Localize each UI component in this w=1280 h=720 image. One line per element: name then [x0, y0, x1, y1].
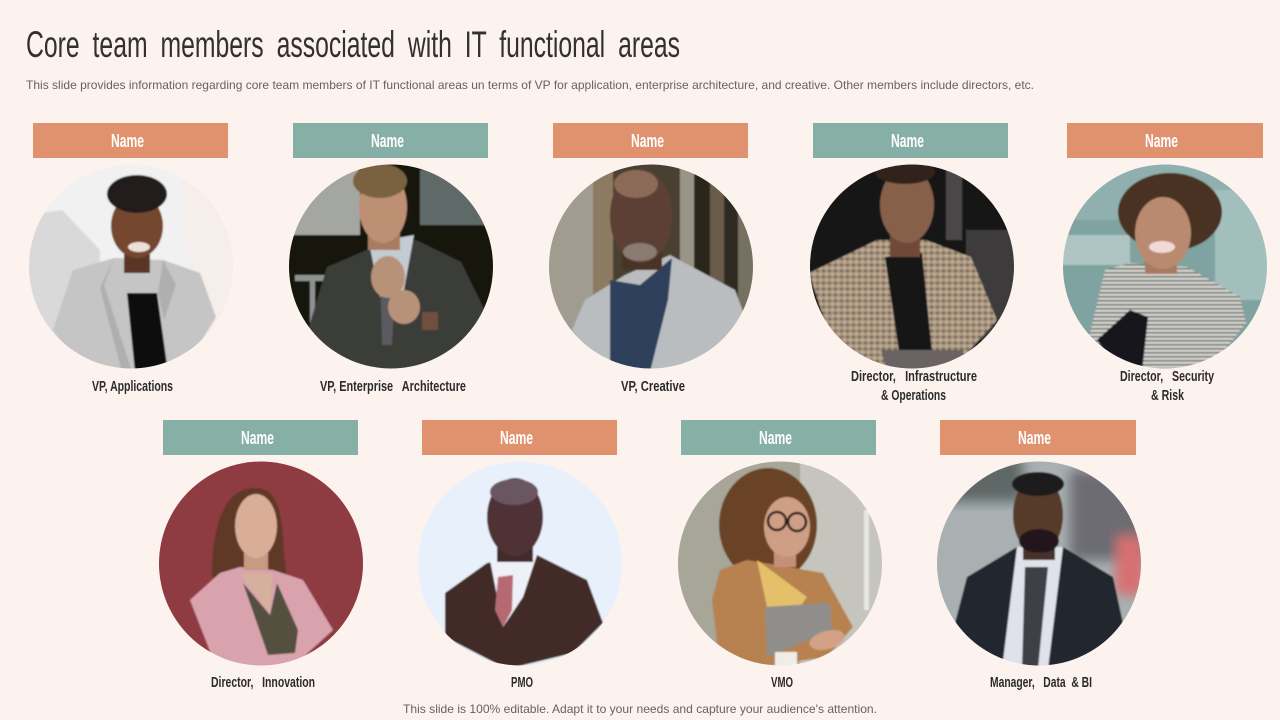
role label: Director, Infrastructure — [851, 369, 977, 385]
footer note: This slide is 100% editable. Adapt it to your needs and capture your audience's attention. — [403, 702, 877, 716]
role label: & Operations — [881, 388, 946, 404]
panel: VP Applications — [25, 123, 240, 395]
panel: Manager Data and BI — [933, 420, 1145, 691]
panel: VP Enterprise Architecture — [285, 123, 497, 395]
portrait: VP Applications — [29, 164, 217, 368]
panel: VP Creative — [545, 123, 758, 395]
panel: PMO — [414, 420, 626, 691]
portrait: PMO — [414, 457, 626, 669]
portrait: VMO — [674, 457, 886, 669]
role label: Director, Security — [1120, 369, 1214, 385]
portrait: Director Security — [1060, 160, 1275, 372]
portrait: Manager Data and BI — [933, 457, 1145, 669]
portrait: VP Enterprise Architecture — [285, 160, 497, 372]
title: Core team members associated with IT functional areas — [26, 24, 680, 65]
panel: Director Security and Risk — [1060, 123, 1275, 404]
name bar — [163, 420, 358, 455]
portrait: Director Infrastructure — [805, 160, 1017, 372]
role label: VP, Creative — [621, 379, 685, 395]
name bar: Name — [241, 428, 274, 448]
role label: Director, Innovation — [211, 675, 315, 691]
portrait: VP Creative — [545, 160, 758, 372]
role label: PMO — [511, 675, 533, 691]
role label: Manager, Data & BI — [990, 675, 1092, 691]
name bar — [813, 123, 1008, 158]
name bar — [293, 123, 488, 158]
name bar: Name — [1145, 131, 1178, 151]
portrait: Director Innovation — [155, 457, 367, 669]
panel: Director Innovation — [155, 420, 367, 691]
role label: VP, Enterprise Architecture — [320, 379, 466, 395]
role label — [1120, 369, 1214, 404]
name bar — [422, 420, 617, 455]
name bar: Name — [371, 131, 404, 151]
name bar — [681, 420, 876, 455]
name bar: Name — [759, 428, 792, 448]
name bar — [33, 123, 228, 158]
name bar — [940, 420, 1136, 455]
name bar — [553, 123, 748, 158]
name bar: Name — [111, 131, 144, 151]
name bar: Name — [1018, 428, 1051, 448]
panel: VMO — [674, 420, 886, 691]
subtitle: This slide provides information regarding core team members of IT functional areas un terms of VP for application, enterprise architecture, and creative. Other members include directors, etc. — [26, 78, 1034, 92]
name bar: Name — [631, 131, 664, 151]
name bar: Name — [891, 131, 924, 151]
panel: Director Infrastructure and Operations — [805, 123, 1017, 404]
role label: VMO — [771, 675, 793, 691]
name bar — [1067, 123, 1263, 158]
name bar: Name — [500, 428, 533, 448]
role label — [851, 369, 977, 404]
role label: VP, Applications — [92, 379, 173, 395]
role label: & Risk — [1151, 388, 1185, 404]
